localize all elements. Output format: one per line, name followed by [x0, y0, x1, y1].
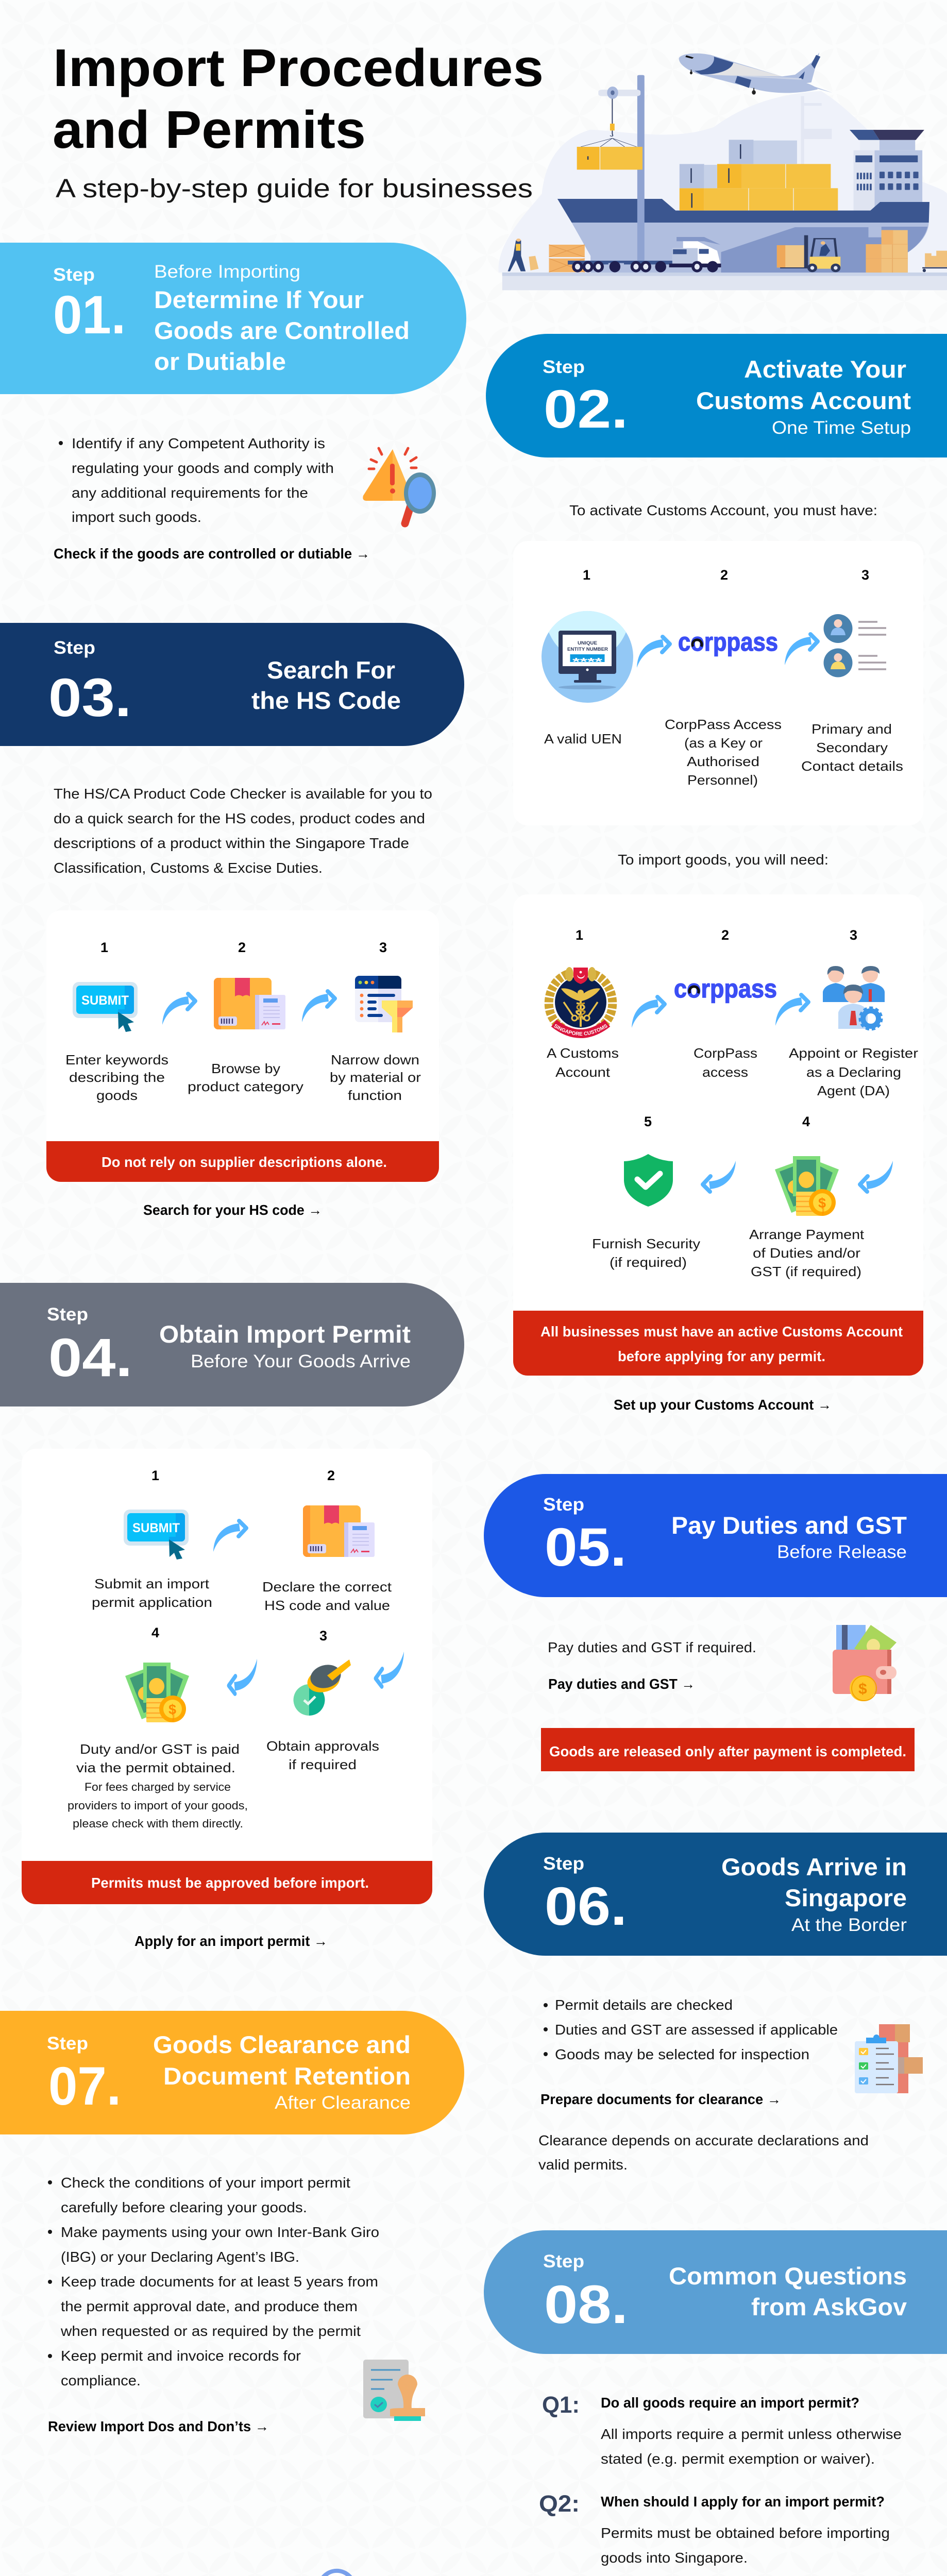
icon: filter list: [355, 976, 413, 1032]
text block: step 07 bullets: Check the conditions of your import permit: [61, 2175, 350, 2191]
callout: [541, 1728, 915, 1771]
icon: UEN monitor: [542, 611, 633, 703]
illustration: world map, logistics workers and cargo ship: [73, 2569, 447, 2576]
labels: (if required): [610, 1255, 687, 1270]
Q2: When should I apply for an import permit?: [601, 2494, 885, 2510]
labels: Primary and: [811, 721, 892, 737]
callout: [513, 1311, 923, 1376]
labels: permit application: [92, 1595, 212, 1610]
worker and crates: [508, 241, 526, 272]
labels: please check with them directly.: [73, 1817, 243, 1830]
panel: activate card: 2: [720, 567, 728, 583]
text block: step 07 bullets: Keep permit and invoice records for: [61, 2348, 301, 2364]
text: import intro: To import goods, you will need:: [618, 852, 828, 868]
ship hull: [572, 223, 929, 273]
hero illustration: ship, crane, truck, forklift and plane: [499, 53, 947, 290]
containers: [704, 164, 838, 211]
arrow: [860, 1161, 893, 1192]
text block: clearance note: Clearance depends on accurate declarations and: [538, 2132, 869, 2148]
icon: document and stamp: [363, 2360, 425, 2421]
labels: [547, 1045, 918, 1098]
panel: step 01 banner: [0, 243, 466, 394]
callout: All businesses must have an active Customs Account: [540, 1324, 903, 1340]
icon: checklist and boxes: [855, 2024, 923, 2093]
forklift: [777, 245, 804, 267]
panel: import needs card: 2: [721, 927, 729, 943]
text block: step 07 bullets: carefully before clearing your goods.: [61, 2199, 307, 2215]
labels: Authorised: [687, 754, 759, 769]
panel: step 04 card: 4: [151, 1625, 159, 1640]
icon: UEN monitor: ENTITY NUMBER: [567, 647, 608, 652]
panel: step 06 banner: At the Border: [791, 1915, 907, 1935]
labels: as a Declaring: [806, 1064, 901, 1080]
text block: step 03 body: do a quick search for the HS codes, product codes and: [54, 810, 425, 826]
icon: package and document: [303, 1505, 375, 1557]
arrow: [376, 1652, 404, 1686]
icon: submit button: SUBMIT: [81, 993, 129, 1008]
location pins: [119, 2569, 393, 2576]
panel: step 01 banner: Step: [53, 265, 95, 285]
panel: step 04 banner: Obtain Import Permit: [159, 1320, 411, 1348]
panel: step 04 banner: 04.: [48, 1328, 132, 1388]
labels: CorpPass: [694, 1045, 757, 1061]
panel: step 05 banner: Step: [543, 1495, 584, 1515]
icon: wallet: [833, 1625, 897, 1701]
panel: step 01 banner: Before Importing: [154, 262, 300, 282]
link: prepare documents: Prepare documents for clearance →: [540, 2091, 781, 2107]
icon: contacts: [823, 614, 886, 677]
text block: step 07 bullets: Make payments using your own Inter-Bank Giro: [61, 2224, 379, 2240]
labels: Furnish Security: [592, 1236, 700, 1251]
text block: step 06 bullets: Goods may be selected for inspection: [555, 2046, 809, 2062]
icon: UEN monitor: ****: [572, 656, 602, 668]
panel: step 04 banner: Step: [47, 1304, 88, 1325]
panel: step 03 card: 3: [379, 940, 387, 955]
labels: product category: [188, 1079, 303, 1094]
icon: customs emblem: SINGAPORE CUSTOMS: [554, 1024, 607, 1036]
text block: step 07 bullets: the permit approval date, and produce them: [61, 2298, 358, 2314]
text block: step 07 bullets: (IBG) or your Declaring Agent’s IBG.: [61, 2249, 299, 2265]
icon: wallet: $: [858, 1681, 867, 1698]
panel: step 04 banner: [0, 1283, 464, 1406]
text block: step 03 body: Classification, Customs & Excise Duties.: [54, 860, 323, 876]
icon: money: $: [818, 1195, 826, 1211]
icon: package and document: [214, 978, 285, 1029]
text block: clearance note: [538, 2132, 869, 2173]
arrow: [162, 994, 195, 1025]
panel: import needs card: 3: [850, 927, 857, 943]
labels: access: [702, 1064, 748, 1080]
Q1: All imports require a permit unless otherwise: [601, 2426, 902, 2442]
panel: step 07 banner: After Clearance: [275, 2093, 411, 2113]
panel: step 06 banner: 06.: [545, 1876, 627, 1937]
callout: Do not rely on supplier descriptions alone.: [102, 1154, 387, 1170]
labels: describing the: [69, 1070, 165, 1085]
icon: green shield: [624, 1154, 673, 1207]
labels: Appoint or Register: [789, 1045, 918, 1061]
labels: (as a Key or: [684, 735, 763, 751]
labels: Contact details: [801, 758, 903, 774]
panel: step 08 banner: Common Questions: [669, 2262, 907, 2290]
crane: [637, 75, 645, 261]
panel: step 07 banner: Goods Clearance and: [153, 2031, 411, 2058]
callout: Goods are released only after payment is completed.: [549, 1743, 906, 1759]
text block: step 03 body: The HS/CA Product Code Checker is available for you to: [54, 786, 432, 802]
text block: step 06 bullets: Permit details are checked: [555, 1997, 733, 2013]
panel: step 02 banner: 02.: [544, 379, 628, 439]
Q2: goods into Singapore.: [601, 2550, 748, 2566]
link: apply permit: Apply for an import permit →: [134, 1933, 328, 1949]
link: check goods: Check if the goods are controlled or dutiable →: [54, 546, 370, 562]
labels: A Customs: [547, 1045, 619, 1061]
text block: step 06 bullets: [544, 1997, 838, 2062]
text block: step 01 body: import such goods.: [72, 509, 201, 525]
labels: Duty and/or GST is paid: [80, 1741, 240, 1757]
icon: money: $: [168, 1702, 176, 1717]
panel: step 08 banner: from AskGov: [751, 2293, 907, 2320]
labels: GST (if required): [751, 1264, 861, 1279]
panel: import needs card: [513, 927, 923, 1376]
labels: [592, 1227, 865, 1279]
text block: step 03 body: descriptions of a product within the Singapore Trade: [54, 835, 409, 851]
panel: step 06 banner: [484, 1833, 947, 1956]
panel: step 07 banner: 07.: [48, 2056, 121, 2116]
Q1: Q1:: [542, 2392, 580, 2418]
text block: step 05 body: Pay duties and GST →: [548, 1676, 695, 1692]
arrow: [637, 637, 670, 668]
text block: step 01 body: [59, 435, 334, 525]
panel: step 02 banner: Customs Account: [696, 387, 911, 414]
text block: step 07 bullets: [48, 2175, 379, 2388]
panel: step 03 banner: the HS Code: [251, 687, 401, 714]
panel: import needs card: 4: [802, 1114, 810, 1129]
Q2: Q2:: [539, 2490, 580, 2517]
panel: step 07 banner: Document Retention: [163, 2062, 411, 2090]
labels: Secondary: [816, 740, 888, 755]
panel: step 03 banner: Search For: [267, 656, 395, 684]
labels: by material or: [330, 1070, 421, 1085]
text block: step 01 body: regulating your goods and comply with: [72, 460, 334, 476]
panel: step 07 banner: Step: [47, 2033, 88, 2054]
stacked boxes: [882, 230, 908, 273]
cart: [922, 266, 947, 269]
Q1: Do all goods require an import permit?: [601, 2395, 859, 2411]
labels: CorpPass Access: [665, 717, 782, 732]
panel: activate card: 1: [583, 567, 590, 583]
labels: Narrow down: [331, 1052, 419, 1067]
text block: step 01 body: any additional requirements for the: [72, 485, 308, 501]
title: and Permits: [53, 100, 366, 159]
text block: step 03 body: [54, 786, 432, 876]
truck: [568, 261, 673, 264]
arrow: [229, 1659, 257, 1693]
labels: of Duties and/or: [753, 1245, 860, 1261]
callout: Permits must be approved before import.: [91, 1875, 369, 1891]
text block: step 05 body: Pay duties and GST if required.: [548, 1639, 756, 1655]
subtitle: A step-by-step guide for businesses: [56, 174, 533, 203]
panel: step 01 banner: 01.: [53, 285, 126, 345]
panel: step 05 banner: Pay Duties and GST: [671, 1512, 907, 1539]
panel: step 08 banner: Step: [543, 2251, 584, 2272]
labels: [544, 717, 903, 788]
text block: step 06 bullets: Duties and GST are assessed if applicable: [555, 2022, 838, 2038]
panel: step 04 card: 3: [319, 1628, 327, 1643]
link: review dos and donts: Review Import Dos and Don’ts →: [48, 2418, 269, 2434]
panel: step 02 banner: [486, 334, 947, 457]
panel: import needs card: 5: [644, 1114, 652, 1129]
labels: goods: [96, 1088, 138, 1103]
panel: step 03 banner: Step: [54, 638, 95, 658]
panel: step 04 card: [22, 1449, 432, 1904]
text block: step 05 body: [548, 1639, 756, 1692]
panel: step 02 banner: Activate Your: [744, 355, 906, 383]
panel: step 01 banner: Determine If Your: [154, 286, 364, 313]
panel: step 02 banner: Step: [543, 357, 585, 377]
logo: corppass: corppass: [678, 628, 778, 656]
labels: HS code and value: [264, 1598, 390, 1613]
arrow: [213, 1521, 246, 1552]
labels: via the permit obtained.: [76, 1760, 235, 1775]
icon: customs emblem: [544, 967, 617, 1038]
icon: money: [775, 1156, 839, 1216]
panel: step 07 banner: [0, 2011, 464, 2134]
panel: step 03 banner: 03.: [48, 668, 131, 728]
icon: submit button: SUBMIT: [132, 1521, 180, 1535]
icon: submit button: [73, 982, 138, 1032]
icon: submit button: [124, 1510, 189, 1560]
plane: [763, 53, 819, 83]
title: Import Procedures: [53, 38, 544, 97]
icon: approval stamp: [294, 1659, 351, 1716]
panel: step 06 banner: Singapore: [785, 1884, 907, 1911]
panel: step 03 card: 2: [238, 940, 246, 955]
panel: step 05 banner: Before Release: [777, 1542, 907, 1562]
panel: step 01 banner: or Dutiable: [154, 348, 286, 375]
labels: A valid UEN: [544, 731, 622, 747]
title: [53, 38, 544, 159]
labels: Personnel): [687, 772, 758, 788]
link: set up account: Set up your Customs Account →: [614, 1397, 832, 1413]
arrow: [302, 991, 335, 1022]
labels: Declare the correct: [262, 1579, 392, 1595]
labels: Account: [555, 1064, 611, 1080]
Q2: Permits must be obtained before importing: [601, 2525, 890, 2541]
panel: step 03 card: [46, 910, 439, 1182]
panel: step 02 banner: One Time Setup: [772, 418, 911, 438]
panel: import needs card: 1: [576, 927, 583, 943]
tower: [854, 150, 874, 212]
callout: [22, 1861, 432, 1904]
labels: function: [348, 1088, 402, 1103]
panel: step 04 banner: Before Your Goods Arrive: [191, 1351, 411, 1371]
panel: step 08 banner: [484, 2230, 947, 2354]
panel: activate card: 3: [861, 567, 869, 583]
text block: clearance note: valid permits.: [538, 2157, 628, 2173]
text block: step 01 body: Identify if any Competent Authority is: [72, 435, 325, 451]
panel: step 03 card: 1: [100, 940, 108, 955]
panel: step 06 banner: Step: [543, 1854, 584, 1874]
labels: Enter keywords: [65, 1052, 168, 1067]
panel: step 04 card: 1: [151, 1468, 159, 1483]
labels: [65, 1052, 421, 1103]
Q1: stated (e.g. permit exemption or waiver).: [601, 2451, 875, 2467]
arrow: [632, 997, 665, 1028]
icon: declaring agents: [823, 966, 885, 1029]
text: activate intro: To activate Customs Account, you must have:: [569, 502, 877, 518]
labels: [92, 1576, 392, 1613]
labels: providers to import of your goods,: [67, 1799, 248, 1812]
panel: step 04 card: 2: [327, 1468, 335, 1483]
panel: step 01 banner: Goods are Controlled: [154, 317, 410, 344]
text block: step 07 bullets: Keep trade documents for at least 5 years from: [61, 2274, 378, 2290]
link: search hs code: Search for your HS code →: [143, 1202, 322, 1218]
callout: [46, 1141, 439, 1182]
logo: corppass: corppass: [674, 974, 777, 1003]
arrow: [775, 995, 808, 1026]
text block: step 07 bullets: when requested or as required by the permit: [60, 2323, 361, 2339]
labels: if required: [289, 1757, 357, 1772]
panel: step 06 banner: Goods Arrive in: [721, 1853, 907, 1880]
labels: Browse by: [211, 1061, 280, 1076]
arrow: [785, 634, 818, 665]
panel: step 03 banner: [0, 623, 464, 746]
panel: step 05 banner: 05.: [545, 1517, 627, 1578]
icon: warning with magnifier: [363, 448, 436, 523]
labels: Agent (DA): [817, 1083, 890, 1098]
labels: [67, 1738, 379, 1830]
Q2: [539, 2490, 890, 2566]
text block: step 07 bullets: compliance.: [61, 2372, 141, 2388]
callout: before applying for any permit.: [618, 1348, 825, 1364]
labels: Arrange Payment: [749, 1227, 865, 1242]
labels: Submit an import: [94, 1576, 210, 1591]
labels: Obtain approvals: [266, 1738, 379, 1754]
panel: activate card: [513, 541, 923, 825]
panel: step 05 banner: [484, 1474, 947, 1597]
icon: money: [125, 1663, 189, 1722]
labels: For fees charged by service: [84, 1781, 231, 1793]
Q1: [542, 2392, 902, 2467]
panel: step 08 banner: 08.: [544, 2275, 628, 2335]
icon: UEN monitor: UNIQUE: [578, 640, 597, 646]
arrow: [703, 1161, 736, 1192]
